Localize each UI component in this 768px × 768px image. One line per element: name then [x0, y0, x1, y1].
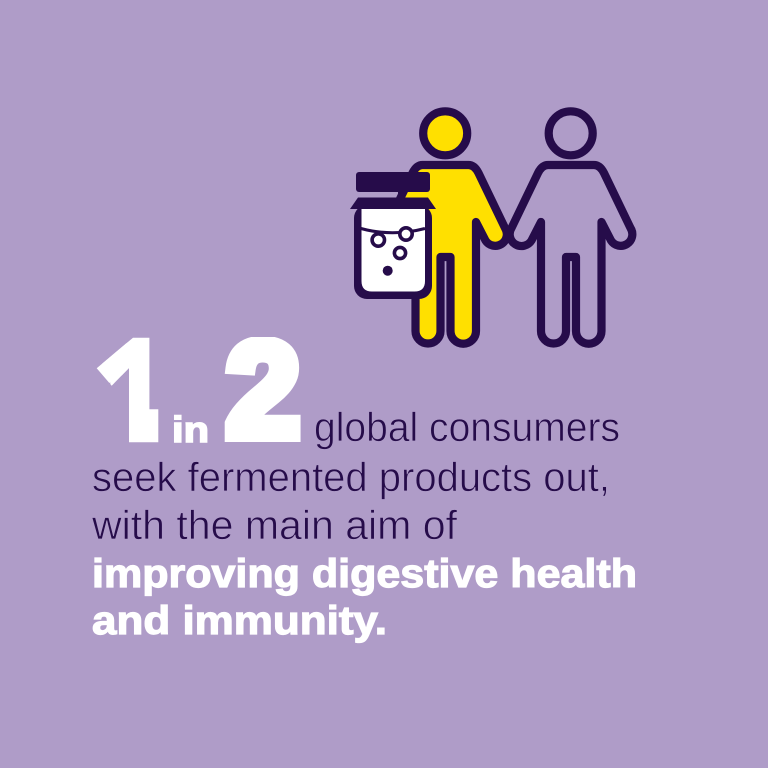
icon: fermented jar: [350, 172, 436, 299]
text line 2: seek fermented products out,: [92, 454, 610, 500]
text line 1: global consumers: [314, 404, 620, 450]
big number 1: 1: [94, 314, 160, 465]
text line 5 bold: and immunity.: [92, 599, 387, 643]
big number 2: 2: [226, 314, 300, 465]
text block: statistic sentence: [91, 314, 637, 643]
icon: left person yellow: [384, 111, 507, 344]
text line 4 bold: improving digestive health: [92, 552, 637, 596]
icon: two people with fermented jar: [350, 111, 632, 344]
icon: right person outline: [510, 111, 632, 344]
text line 3: with the main aim of: [91, 502, 458, 548]
word in: in: [172, 409, 209, 450]
